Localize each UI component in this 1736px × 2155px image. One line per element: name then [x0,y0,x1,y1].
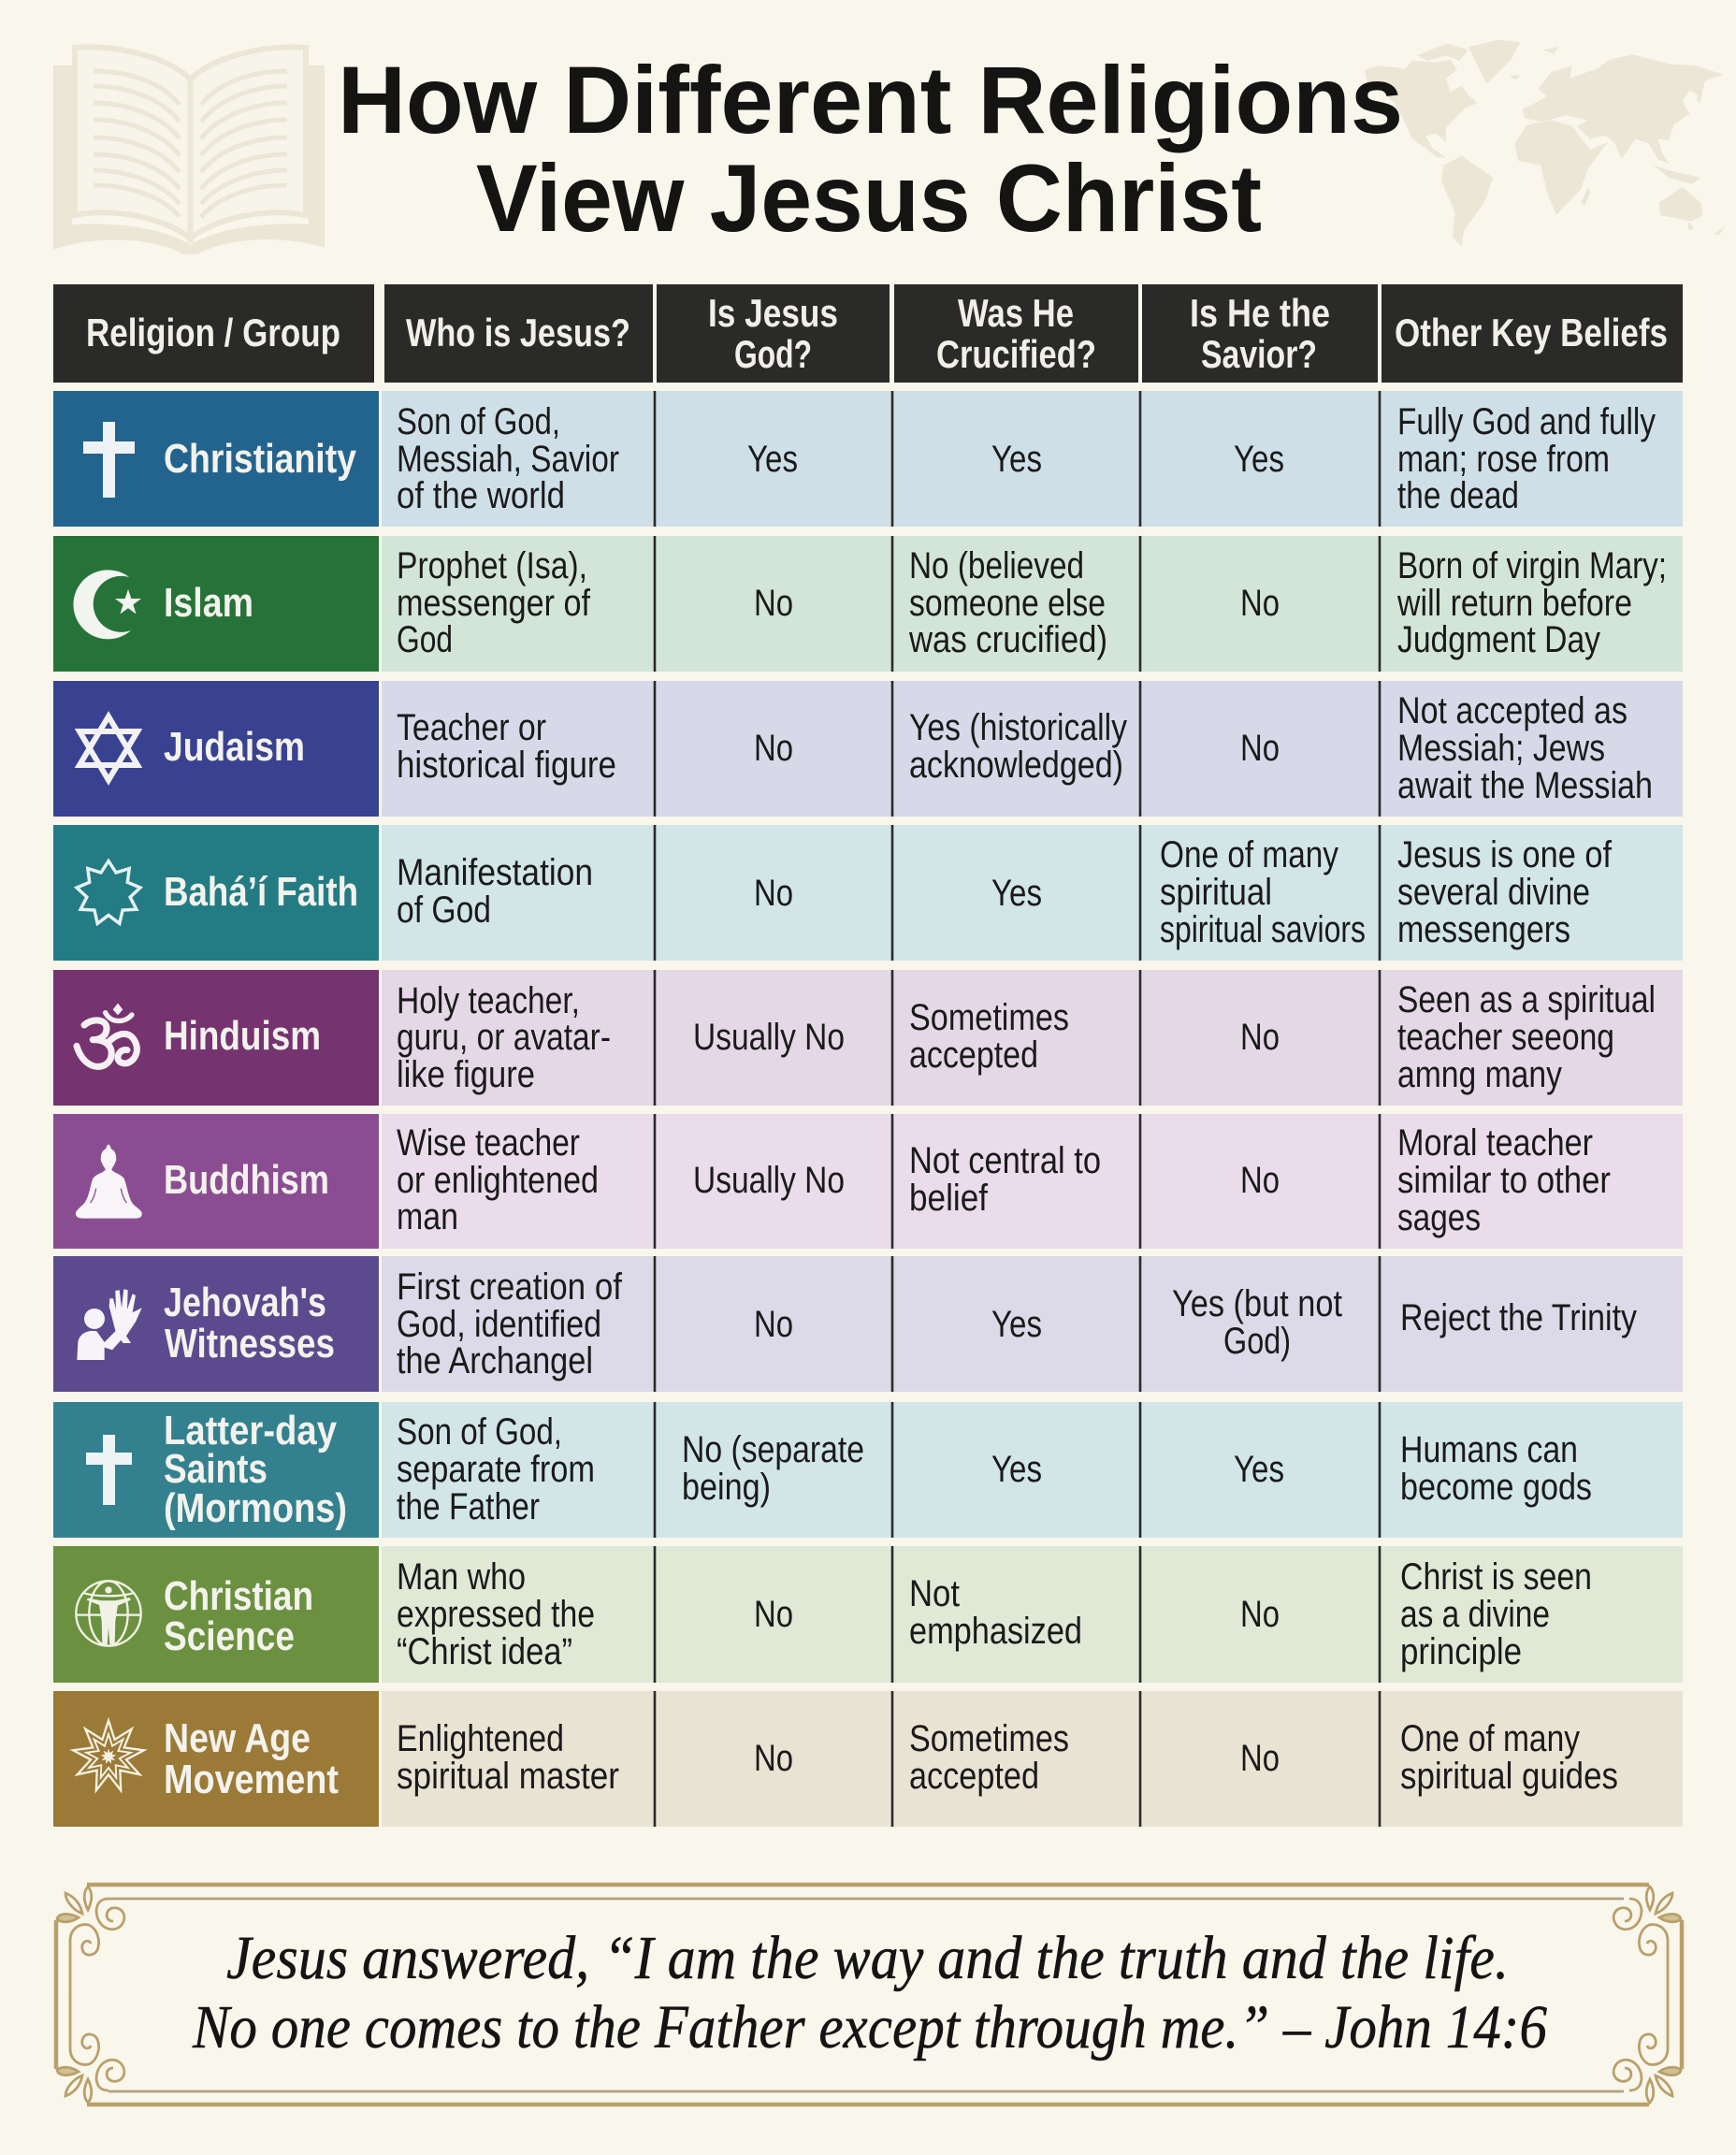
row: Judaism: await the Messiah [1397,765,1653,806]
row: Bahá'í Faith: spiritual [1160,872,1272,913]
icon: nested star [73,1721,144,1790]
row: Christian Science: Science [164,1613,295,1659]
row: Christian Science: as a divine [1400,1594,1550,1635]
row: Islam: God [397,619,453,660]
row: Buddhism: Buddhism [164,1157,329,1203]
row: Jehovah's Witnesses: Yes [991,1304,1042,1345]
icon: world map watermark [1365,40,1726,246]
icon: nine-pointed star [77,861,140,923]
table header row: Is He the [1190,291,1330,335]
quote text: No one comes to the Father except through me.” – John 14:6 [192,1993,1547,2061]
row: Bahá'í Faith: spiritual saviors [1160,909,1366,950]
row: Jehovah's Witnesses: God, identified [397,1304,601,1345]
row: Islam: Prophet (Isa), [397,545,587,586]
row: Islam: someone else [909,583,1106,624]
row: Jehovah's Witnesses: No [754,1304,793,1345]
row: New Age Movement: spiritual master [397,1756,619,1797]
row: Latter-day Saints: become gods [1400,1467,1592,1508]
row: Buddhism: sages [1397,1197,1481,1238]
title: How Different Religions [338,47,1403,153]
row: Jehovah's Witnesses: Reject the Trinity [1400,1297,1637,1338]
row: Christianity: Messiah, Savior [397,439,619,480]
row: New Age Movement [53,1691,1683,1827]
row: Latter-day Saints: (Mormons) [164,1485,347,1531]
row: Latter-day Saints: separate from [397,1449,595,1490]
icon: om symbol [77,1004,137,1066]
panel: scripture quote frame [56,1885,1682,2104]
row: Buddhism: or enlightened [397,1160,599,1201]
row: Islam: No (believed [909,545,1084,586]
row: Christianity: Yes [991,439,1042,480]
row: Judaism: Yes (historically [909,707,1127,748]
row: Buddhism: No [1240,1160,1280,1201]
row: Hinduism: like figure [397,1054,535,1095]
row: Bahá'í Faith: Manifestation [397,852,593,893]
row: Latter-day Saints: Humans can [1400,1429,1578,1470]
row: Buddhism: Wise teacher [397,1122,580,1164]
row: Buddhism: Moral teacher [1397,1122,1593,1164]
table header row: God? [734,332,812,376]
row: Hinduism: accepted [909,1034,1038,1076]
row: Judaism: Teacher or [397,707,546,748]
table header row: Who is Jesus? [406,311,630,354]
row: Hinduism: Seen as a spiritual [1397,979,1656,1020]
row: Judaism: historical figure [397,745,616,786]
row: Latter-day Saints: Latter-day [164,1408,337,1454]
row: Islam: Judgment Day [1397,619,1600,660]
row: Christian Science: No [754,1594,793,1635]
row: New Age Movement: No [1240,1738,1280,1779]
icon: meditating figure [76,1144,142,1219]
row: Latter-day Saints: No (separate [682,1429,864,1470]
row: Hinduism [53,970,1683,1106]
row: Jehovah's Witnesses: the Archangel [397,1340,593,1381]
row: New Age Movement: Movement [164,1757,339,1802]
row: New Age Movement: One of many [1400,1718,1580,1759]
row: Hinduism: Sometimes [909,997,1069,1038]
row: Christian Science [53,1546,1683,1683]
row: Bahá'í Faith: several divine [1397,872,1590,913]
row: Christian Science: Not [909,1573,960,1614]
row: Latter-day Saints: the Father [397,1486,540,1527]
row: Islam: Islam [164,580,253,626]
row: Christianity: Son of God, [397,401,560,442]
row: Christianity: Yes [747,439,798,480]
row: Christian Science: Christian [164,1573,313,1619]
row: Judaism: Judaism [164,724,305,770]
table header row: Savior? [1201,332,1317,376]
row: Islam: messenger of [397,583,591,624]
row: Islam: will return before [1396,583,1632,624]
row: New Age Movement: No [754,1738,793,1779]
icon: cross [83,422,135,498]
row: Christian Science: Man who [397,1556,526,1598]
row: New Age Movement: spiritual guides [1400,1756,1618,1797]
row: Christianity: Yes [1234,439,1284,480]
row: Jehovah's Witnesses [53,1256,1683,1392]
row: Judaism [53,681,1683,817]
row: Christian Science: expressed the [397,1594,595,1635]
row: Buddhism: man [397,1196,458,1237]
table header row: Was He [958,291,1074,335]
row: Judaism: Not accepted as [1397,690,1628,731]
quote text [192,1924,1547,2061]
row: Bahá'í Faith: Yes [991,873,1042,914]
row: New Age Movement: Enlightened [397,1718,564,1759]
row: Christian Science: Christ is seen [1400,1556,1592,1598]
row: Islam: No [1240,583,1280,624]
row: Buddhism: belief [909,1178,989,1219]
row: Christianity: the dead [1397,475,1519,516]
row: Judaism: No [754,728,793,769]
row: Islam [53,536,1683,672]
row: Christian Science: No [1240,1594,1280,1635]
table header row: Is Jesus [708,291,838,335]
row: Christianity [53,391,1683,527]
row: Bahá'í Faith: No [754,873,793,914]
row: Bahá'í Faith: messengers [1397,909,1570,950]
row: Buddhism: Usually No [693,1160,845,1201]
row: Buddhism [53,1114,1683,1249]
row: Hinduism: Holy teacher, [397,980,580,1021]
row: Jehovah's Witnesses: Yes (but not [1172,1283,1342,1324]
row: Bahá'í Faith [53,825,1683,961]
row: Islam: Born of virgin Mary; [1397,545,1667,586]
row: Judaism: No [1240,728,1280,769]
row: Christianity: man; rose from [1397,439,1610,480]
row: Latter-day Saints: Son of God, [397,1411,562,1453]
row: Christian Science: “Christ idea” [397,1631,572,1672]
row: Islam: No [754,583,793,624]
row: Bahá'í Faith: Bahá’í Faith [164,869,358,915]
row: Latter-day Saints: Saints [164,1446,268,1492]
table header row [53,284,1683,383]
row: Latter-day Saints: Yes [1234,1449,1284,1490]
title: View Jesus Christ [476,145,1262,252]
row: Jehovah's Witnesses: Jehovah's [164,1280,326,1325]
icon: cross [86,1435,132,1505]
title [338,47,1403,252]
row: Judaism: Messiah; Jews [1397,728,1605,769]
row: Islam: was crucified) [908,619,1107,660]
row: Hinduism: guru, or avatar- [397,1017,611,1058]
table header row: Other Key Beliefs [1395,311,1668,354]
row: Hinduism: teacher seeong [1397,1017,1614,1058]
row: Latter-day Saints: Yes [991,1449,1042,1490]
row: Jehovah's Witnesses: First creation of [397,1266,623,1308]
row: New Age Movement: Sometimes [909,1718,1069,1759]
row: Bahá'í Faith: One of many [1160,834,1338,875]
icon: person with raised hand [77,1289,142,1360]
row: Bahá'í Faith: Jesus is one of [1397,834,1613,875]
row: New Age Movement: New Age [164,1715,311,1761]
row: Christian Science: emphasized [909,1611,1082,1652]
icon: globe with figure [76,1581,141,1646]
icon: crescent and star [73,570,141,639]
row: Christianity: Fully God and fully [1397,401,1656,442]
quote text: Jesus answered, “I am the way and the truth and the life. [226,1924,1509,1992]
row: Hinduism: amng many [1397,1054,1562,1095]
row: Christianity: of the world [397,475,565,516]
table header row: Crucified? [936,332,1096,376]
row: Judaism: acknowledged) [909,745,1123,786]
table header row: Religion / Group [86,311,340,354]
row: Buddhism: similar to other [1397,1160,1611,1201]
row: Buddhism: Not central to [909,1140,1101,1181]
row: Hinduism: Usually No [693,1017,845,1058]
row: Christianity: Christianity [164,436,356,482]
row: Jehovah's Witnesses: Witnesses [165,1321,335,1367]
row: Latter-day Saints [53,1402,1683,1538]
row: Hinduism: Hinduism [164,1013,321,1059]
icon: star of David [80,716,137,780]
icon: open book watermark [53,47,325,254]
row: Christian Science: principle [1400,1631,1522,1672]
row: Bahá'í Faith: of God [397,889,491,931]
row: Latter-day Saints: being) [682,1467,771,1508]
row: New Age Movement: accepted [909,1756,1039,1797]
row: Hinduism: No [1240,1017,1280,1058]
row: Jehovah's Witnesses: God) [1223,1321,1291,1362]
